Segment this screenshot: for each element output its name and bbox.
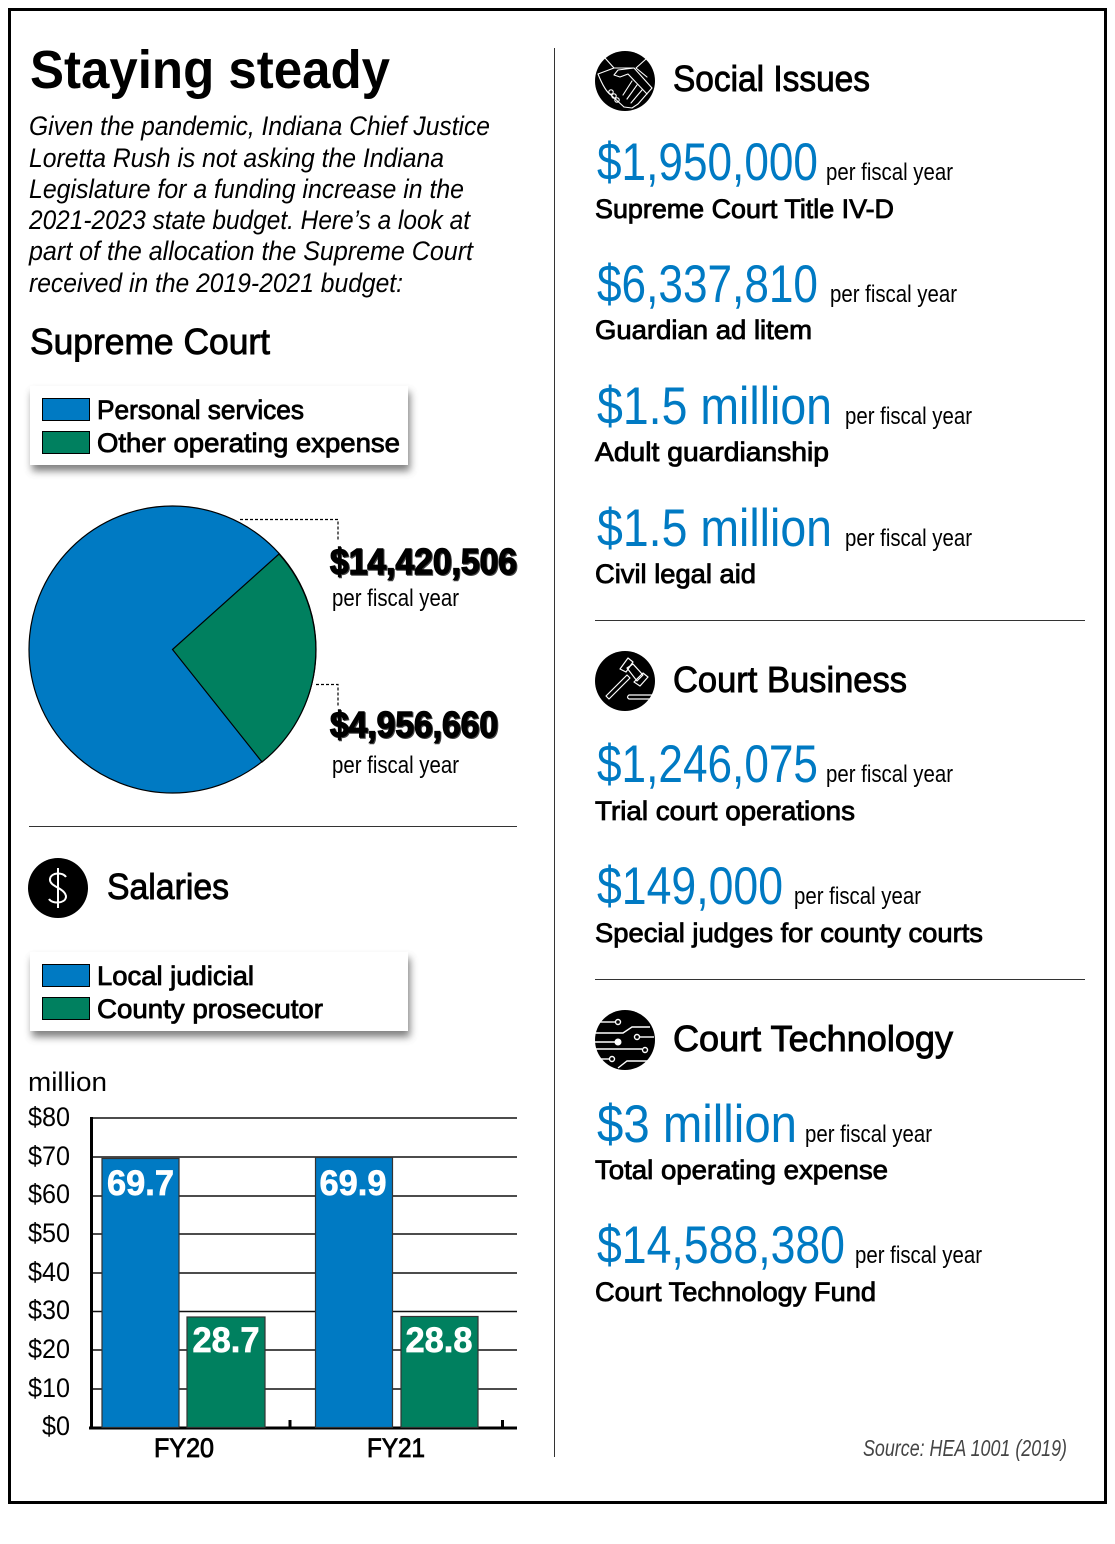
- item: Adult guardianship: [595, 377, 972, 467]
- item: Supreme Court Title IV-D: [595, 133, 953, 224]
- y axis labels: $70: [28, 1141, 70, 1171]
- pie chart: [29, 506, 316, 793]
- item: Guardian ad litem: $6,337,810: [597, 255, 818, 314]
- item: Civil legal aid: per fiscal year: [845, 525, 972, 552]
- y axis labels: [28, 1102, 70, 1441]
- item: Special judges for county courts: per fiscal year: [794, 883, 921, 910]
- y axis labels: $80: [28, 1102, 70, 1132]
- item: Court Technology Fund: Court Technology Fund: [595, 1277, 876, 1307]
- bar: FY21 county prosecutor: [401, 1316, 478, 1428]
- panel: Salaries: [28, 858, 517, 1463]
- legend: Salaries: Local judicial: [97, 961, 254, 991]
- panel: Court Technology: [595, 1010, 982, 1307]
- y axis labels: $60: [28, 1179, 70, 1209]
- item: Adult guardianship: Adult guardianship: [595, 437, 829, 467]
- legend: Supreme Court: Personal services: [97, 395, 304, 425]
- item: Total operating expense: per fiscal year: [805, 1121, 932, 1148]
- item: Supreme Court Title IV-D: Supreme Court Title IV-D: [595, 194, 894, 224]
- intro paragraph: Legislature for a funding increase in the: [29, 174, 464, 204]
- icon: gavel: [595, 651, 655, 711]
- callout: other operating expense amount: per fiscal year: [332, 752, 459, 779]
- item: Special judges for county courts: [595, 857, 983, 948]
- item: Civil legal aid: $1.5 million: [597, 499, 832, 558]
- item: Adult guardianship: per fiscal year: [845, 403, 972, 430]
- item: Court Technology Fund: per fiscal year: [855, 1242, 982, 1269]
- bar: FY21 local judicial: [316, 1158, 392, 1428]
- column divider: [554, 48, 556, 1457]
- callout: personal services amount: $14,420,506: [331, 542, 518, 583]
- divider: [595, 978, 1085, 980]
- intro paragraph: Given the pandemic, Indiana Chief Justice: [29, 111, 490, 141]
- heading: Court Business: Court Business: [673, 659, 907, 700]
- item: Civil legal aid: Civil legal aid: [595, 559, 756, 589]
- item: Special judges for county courts: Special judges for county courts: [595, 918, 983, 948]
- y axis labels: $40: [28, 1257, 70, 1287]
- legend: Supreme Court: Other operating expense: [97, 428, 400, 458]
- axis unit: million: [28, 1067, 107, 1097]
- panel: Social Issues: [595, 51, 972, 589]
- title: Staying steady: [30, 40, 390, 100]
- legend: Salaries: County prosecutor: [97, 994, 323, 1024]
- item: Total operating expense: Total operating expense: [595, 1155, 888, 1185]
- callout: other operating expense amount: $4,956,660: [330, 704, 498, 745]
- bar: FY20 county prosecutor: [187, 1317, 265, 1428]
- heading: Court Technology: Court Technology: [673, 1018, 953, 1059]
- icon: handshake: [595, 51, 655, 111]
- heading: Salaries: Salaries: [107, 866, 229, 907]
- legend: Supreme Court: [30, 386, 410, 471]
- callout: other operating expense amount: $4,956,660: [331, 705, 499, 746]
- intro paragraph: [28, 111, 490, 298]
- y axis labels: $10: [28, 1373, 70, 1403]
- item: Adult guardianship: $1.5 million: [597, 377, 832, 436]
- bar chart: [28, 1067, 517, 1463]
- y axis labels: $0: [42, 1411, 70, 1441]
- item: Guardian ad litem: per fiscal year: [830, 281, 957, 308]
- icon: dollar sign: [28, 858, 88, 918]
- callout: personal services amount: [330, 541, 518, 612]
- item: Guardian ad litem: [595, 255, 957, 345]
- item: Court Technology Fund: [595, 1216, 982, 1307]
- item: Trial court operations: per fiscal year: [826, 761, 953, 788]
- item: Guardian ad litem: Guardian ad litem: [595, 315, 812, 345]
- item: Trial court operations: [595, 735, 953, 826]
- panel: Supreme Court: [29, 321, 518, 793]
- bar: FY20 local judicial: 69.7: [107, 1164, 174, 1203]
- intro paragraph: received in the 2019-2021 budget:: [29, 268, 403, 298]
- y axis labels: $50: [28, 1218, 70, 1248]
- icon: circuit: [595, 1010, 655, 1070]
- intro paragraph: 2021-2023 state budget. Here’s a look at: [28, 205, 471, 235]
- heading: Social Issues: Social Issues: [673, 58, 870, 99]
- bar: FY20 local judicial: [102, 1158, 179, 1428]
- item: Court Technology Fund: $14,588,380: [597, 1216, 845, 1275]
- y axis labels: $30: [28, 1295, 70, 1325]
- item: Trial court operations: Trial court operations: [595, 796, 855, 826]
- item: Trial court operations: $1,246,075: [597, 735, 818, 794]
- intro paragraph: Loretta Rush is not asking the Indiana: [29, 143, 444, 173]
- divider: [595, 620, 1085, 622]
- bar: FY21 local judicial: 69.9: [320, 1164, 386, 1203]
- item: Total operating expense: [595, 1095, 932, 1185]
- item: Special judges for county courts: $149,000: [597, 857, 783, 916]
- heading: Supreme Court: Supreme Court: [30, 321, 270, 362]
- item: Total operating expense: $3 million: [597, 1095, 797, 1154]
- callout: other operating expense amount: [330, 704, 499, 779]
- callout: personal services amount: $14,420,506: [330, 541, 517, 582]
- x axis label: FY21: FY21: [367, 1433, 425, 1463]
- item: Supreme Court Title IV-D: $1,950,000: [597, 133, 818, 192]
- panel: Court Business: [595, 651, 983, 948]
- divider: [29, 826, 517, 828]
- x axis label: FY20: FY20: [154, 1433, 214, 1463]
- intro paragraph: part of the allocation the Supreme Court: [28, 236, 474, 266]
- leader line: personal services: [240, 520, 338, 541]
- bar: FY20 county prosecutor: 28.7: [192, 1321, 260, 1360]
- item: Supreme Court Title IV-D: per fiscal year: [826, 159, 953, 186]
- y axis labels: $20: [28, 1334, 70, 1364]
- item: Civil legal aid: [595, 499, 972, 589]
- leader line: other operating expense: [316, 684, 338, 706]
- legend: Salaries: [30, 952, 410, 1037]
- callout: personal services amount: per fiscal year: [332, 585, 459, 612]
- bar: FY21 county prosecutor: 28.8: [406, 1321, 472, 1360]
